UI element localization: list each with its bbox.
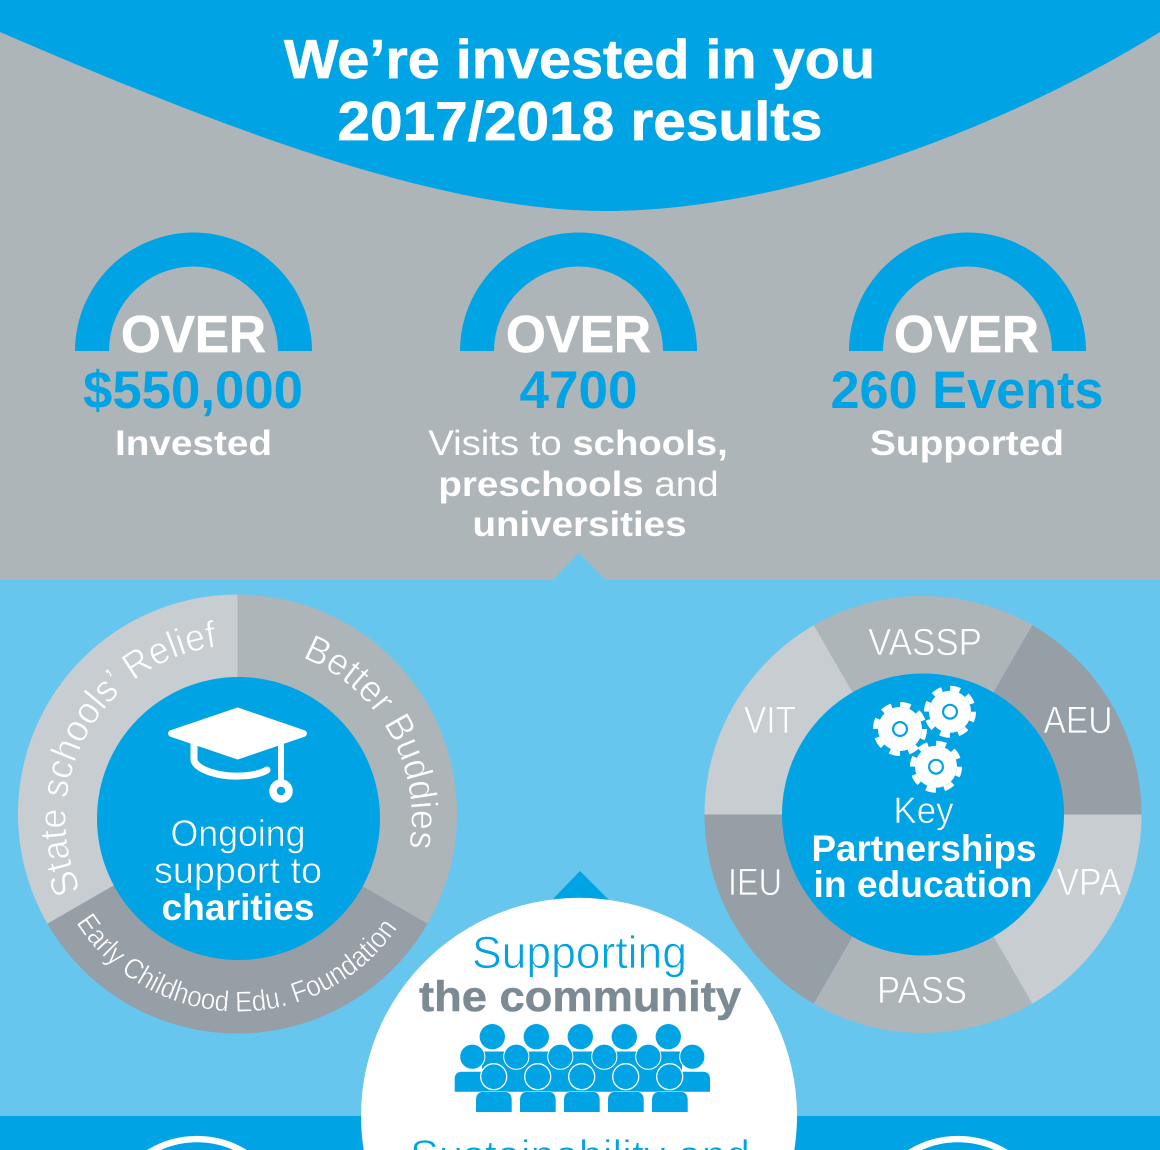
panel: results background [0, 0, 1160, 580]
label: Early Childhood Edu. Foundation: Early Childhood Edu. Foundation [77, 913, 396, 1012]
chart: charities donut [18, 594, 457, 1034]
text: key partnerships in education: in education [814, 864, 1032, 905]
stat: over $550,000 invested: OVER [121, 306, 266, 364]
stat: over 260 events: OVER [894, 306, 1039, 364]
stat: over 260 events [830, 232, 1104, 463]
heading: the community: the community [419, 973, 741, 1021]
stat: over 4700 visits [428, 232, 728, 544]
stat: over $550,000 invested: Invested [115, 424, 272, 463]
title: 2017/2018 results [338, 90, 822, 152]
icon: gears [876, 688, 974, 790]
label: Better Buddies: Better Buddies [305, 636, 438, 848]
panel: supporting the community [361, 898, 797, 1150]
centre circle [97, 677, 380, 960]
label: State schools' Relief: State schools’ Relief [42, 620, 214, 895]
text: ongoing support to charities [154, 813, 322, 928]
stat: over $550,000 invested: $550,000 [83, 361, 303, 420]
icon: right circle outline [908, 1136, 1008, 1150]
labels: partner names: IEU [728, 862, 782, 904]
arrow: blue triangle [552, 871, 609, 900]
icon: people group [455, 1024, 710, 1112]
labels: partner names [728, 622, 1122, 1012]
stat: over 260 events: Supported [870, 424, 1064, 463]
title: We’re invested in you [284, 28, 875, 90]
labels: partner names: VIT [744, 700, 796, 742]
text: key partnerships in education [812, 790, 1036, 905]
icon: graduation cap [168, 708, 306, 799]
centre circle [782, 674, 1064, 956]
labels: partner names: VASSP [868, 622, 982, 664]
labels: partner names: PASS [877, 970, 967, 1012]
text: ongoing support to charities: charities [162, 887, 314, 928]
stat: over 4700 visits: Visits to schools, [428, 424, 728, 463]
text: key partnerships in education: Partnerships [812, 828, 1036, 869]
stat: over 4700 visits: OVER [506, 306, 651, 364]
footer: blue strip [0, 1116, 1160, 1150]
icon: arch [849, 232, 1086, 351]
text: ongoing support to charities: Ongoing [170, 813, 306, 854]
stat: over 4700 visits: 4700 [520, 361, 638, 420]
labels: partner names: AEU [1044, 700, 1112, 742]
icon: arch [460, 232, 697, 351]
heading: supporting: Supporting [472, 927, 687, 978]
title [284, 28, 875, 152]
chart: partnerships donut [704, 596, 1142, 1033]
labels: partner names: VPA [1056, 862, 1122, 904]
text: key partnerships in education: Key [894, 790, 954, 831]
panel: light blue section [0, 553, 1160, 1116]
stat: over $550,000 invested [75, 233, 312, 463]
stat: over 260 events: 260 Events [830, 361, 1104, 420]
stat: over 4700 visits: universities [472, 505, 686, 544]
stat: over 4700 visits: preschools and [438, 465, 719, 504]
icon: left circle outline [147, 1136, 247, 1150]
text: ongoing support to charities: support to [154, 850, 322, 891]
header: blue curved banner [0, 0, 1160, 211]
icon: arch [75, 233, 312, 351]
